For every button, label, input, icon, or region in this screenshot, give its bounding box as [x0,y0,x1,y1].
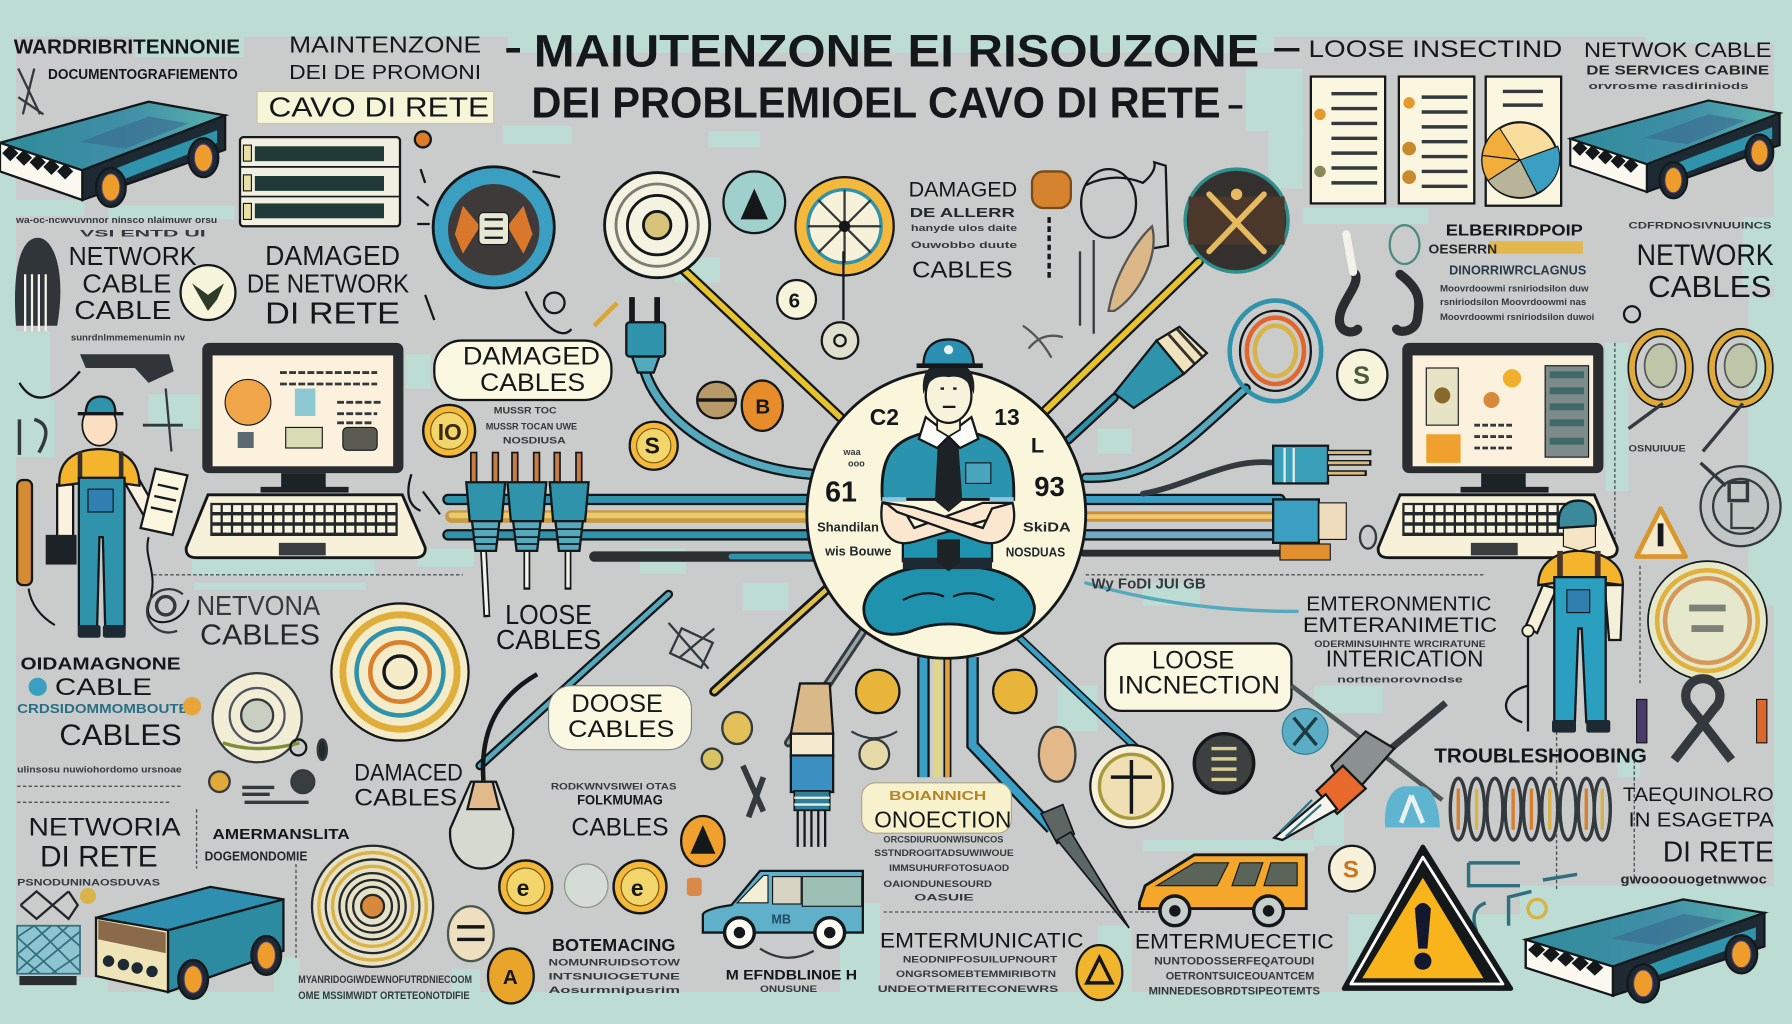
text: damaced cables: CABLES [354,785,457,812]
coins and doodles left of centre: IO [438,419,462,445]
mesh grid [17,888,96,985]
text block emtermunicatic [878,927,1083,994]
label: damaged cables: CABLES [480,369,585,397]
worker left [17,354,189,638]
fine print upper right: rsniriodsilon Moovrdoowmi nas [1440,297,1586,307]
heading: network cable top right: NETWOK CABLE [1584,37,1771,62]
coil top right [1230,301,1321,401]
fine print under coil: OME MSSIMWIDT ORTETEONOTDIFIE [298,990,470,1002]
fine numbers in circle: Shandilan [817,520,879,534]
small text amermanslita: DOGEMONDOMIE [205,850,307,864]
text block emtermunicatic: UNDEOTMERITECONEWRS [878,984,1058,994]
text: environment interaction: EMTERONMENTIC [1306,592,1492,615]
heading: maintenance box [257,32,494,123]
text: troubleshooting right [1621,784,1774,886]
label: loose connection: INCNECTION [1118,672,1280,700]
server rack [240,137,400,226]
cable spring [1450,778,1610,840]
text: environment interaction: Wy FoDI JUI GB [1091,577,1206,593]
text: netvona cables: CABLES [200,620,320,652]
label: connection: OASUIE [914,893,974,903]
text block cables lower middle: CABLES [571,813,669,841]
heading: top left maintenance [14,36,240,114]
fine print upper right: OESERRN [1429,243,1497,257]
cable ring right [1648,561,1767,680]
text: cable block left: ulinsosu nuwiohordomo ursnoae [17,765,182,775]
coil lower left [331,603,469,741]
documents with pie chart [1311,77,1561,206]
damaged cables top text [909,177,1017,283]
text block emtermuecetic: NUNTODOSSERFEQATOUDI [1154,956,1314,968]
label: connection: BOIANNICH [889,789,986,803]
screwdriver tool [1274,686,1446,840]
text: networia di rete: DI RETE [40,840,158,873]
text: cable block left: OIDAMAGNONE [21,654,181,674]
switch top left [0,102,225,207]
text: network cables right: NETWORK [1637,239,1774,272]
monitor left [202,343,403,493]
fine numbers in circle: waa [842,447,862,457]
heading: maintenance box: CAVO DI RETE [269,92,489,123]
label: loose connection: LOOSE [1152,647,1234,675]
damaged cables top text: DAMAGED [909,177,1017,202]
text: cable block left [17,654,189,775]
s badge bottom: S [1343,857,1359,884]
damaged cables top text: CABLES [912,257,1013,283]
title [506,25,1299,128]
text: cable block left: CRDSIDOMMOMBOUTE [17,702,189,716]
text block lower centre left: NOMUNRUIDSOTOW [549,958,681,968]
damaged cables top text: DE ALLERR [910,206,1015,220]
label: loose connection [1105,643,1291,711]
warning small right [1637,509,1686,557]
icon: wires hanging [1023,162,1168,358]
golden cable loops right [1624,306,1769,453]
text: network cable left [69,241,197,325]
small text amermanslita [205,827,350,864]
text: network cable left: CABLE [74,295,171,325]
text: damaged network di rete [247,240,410,330]
scattered doodles upper left [415,131,617,333]
keyboard right [1378,495,1617,558]
switch bottom right [1526,899,1764,1002]
label: connection: ORCSDIURUONWISUNCOS [883,834,1003,844]
text block cables lower middle: RODKWNVSIWEI OTAS [551,782,677,792]
text block emtermuecetic: OETRONTSUICEOUANTCEM [1166,970,1314,982]
label: connection: IMMSUHURFOTOSUAOD [889,863,1010,873]
coins and doodles left of centre: 6 [789,289,800,312]
small badge S: S [1353,362,1370,390]
icon: concentric cable coil [605,173,710,278]
text: damaged network di rete: DAMAGED [265,240,400,271]
heading: network cable top right: DE SERVICES CABINE [1586,63,1769,77]
three plugs [466,453,589,617]
heading: network cable top right: orvrosme rasdiriniods [1589,81,1749,91]
big warning triangle [1344,847,1511,989]
fine print upper right: Moovrdoowmi rsniriodsilon duwoi [1440,312,1594,322]
small badge S [1337,350,1387,400]
dashed separators [17,343,1640,958]
blue x badge [1282,709,1328,754]
badge cross [1090,745,1173,827]
fine print separators left [15,215,217,343]
fine print upper right: DINORRIWRCLAGNUS [1449,263,1586,277]
label: doose cables [549,686,691,750]
label: damaged cables: DAMAGED [463,343,600,371]
text: netvona cables: NETVONA [197,590,321,621]
spiral coil bottom [312,846,433,967]
icon: orange pot [1032,171,1071,208]
pliers icons [1339,225,1419,332]
text: cable block left: CABLES [59,719,182,752]
label: connection: ONOECTION [874,806,1011,832]
doodle near warning [1469,863,1577,931]
text block cables lower middle: FOLKMUMAG [577,793,663,808]
icon: bird badge [181,265,235,320]
text block lower centre left [549,935,857,995]
icon: blue ring connector [433,167,554,288]
text block emtermunicatic: ONGRSOMEBTEMMIRIBOTN [896,969,1056,979]
fine numbers in circle: C2 [870,404,899,430]
coil badge [183,673,327,762]
keyboard left [186,495,425,558]
label: doose cables: DOOSE [571,690,663,718]
label: connection [862,783,1014,903]
icon: crossed tools badge [1185,169,1288,272]
text: networia di rete: NETWORIA [29,813,181,841]
damaged cables top text: hanyde ulos daite [911,223,1017,233]
coins and doodles left of centre: S [645,433,660,459]
text: environment interaction: EMTERANIMETIC [1303,612,1497,637]
small text amermanslita: AMERMANSLITA [213,827,350,843]
fine numbers in circle: wis Bouwe [824,544,891,558]
plug lower centre [791,683,833,847]
cable connectors right of centre [1273,446,1376,560]
van [703,871,863,958]
heading: troubleshooting: TROUBLESHOOBING [1434,744,1647,767]
damaged cables top text: Ouwobbo duute [911,240,1017,250]
fine print upper right: Moovrdoowmi rsniriodsilon duw [1440,283,1590,293]
text block lower centre left: M EFNDBLIN0E H [726,967,857,982]
text block emtermuecetic: EMTERMUECETIC [1135,929,1334,954]
coins and doodles left of centre: NOSDIUSA [503,435,566,445]
fine print under coil: MYANRIDOGIWDEWNOFUTRDNIECOOM [298,974,472,986]
fine print upper right [1429,222,1594,322]
text block lower centre left: ONUSUNE [760,984,817,994]
title: MAIUTENZONE EI RISOUZONE [534,25,1259,76]
car [1139,855,1306,926]
grey coin right [1701,463,1781,546]
warning small and coins lower middle [488,816,725,1003]
icon: black cable bundle [15,238,60,331]
coins and doodles left of centre: MUSSR TOCAN UWE [486,422,577,432]
small doodles lower centre [209,623,1075,817]
text: damaged network di rete: DE NETWORK [247,269,410,299]
coins and doodles left of centre: B [755,396,770,419]
text: loose cables: LOOSE [505,599,592,630]
fine numbers in circle: L [1031,433,1044,458]
text: environment interaction [1091,577,1497,684]
fine numbers in circle: NOSDUAS [1006,546,1065,560]
text: cable block left: CABLE [55,674,152,701]
text: network cable left: NETWORK [69,241,197,271]
warning shield bottom [1077,945,1122,1000]
fine print separators left: sunrdnlmmemenumin nv [71,333,186,343]
fine numbers in circle: 93 [1034,471,1065,502]
heading: top left maintenance: DOCUMENTOGRAFIEMENTO [48,67,238,83]
fine numbers in circle: 61 [825,477,857,509]
text: damaged network di rete: DI RETE [265,295,400,330]
fine numbers in circle [817,404,1071,560]
heading: maintenance box: MAINTENZONE [289,32,481,58]
text: troubleshooting right: IN ESAGETPA [1629,808,1774,831]
golden cable loops right: OSNUIUUE [1629,443,1686,453]
seated worker figure [864,339,1034,634]
fine print upper right: ELBERIRDPOIP [1446,222,1583,239]
icon: clock [723,171,785,233]
ribbon and probes [1637,679,1767,760]
text block emtermuecetic: MINNEDESOBRDTSIPEOTEMTS [1149,985,1320,997]
text: environment interaction: INTERICATION [1326,645,1483,671]
label: connection: OAIONDUNESOURD [883,879,992,889]
text block lower centre left: BOTEMACING [552,935,675,955]
text block emtermuecetic [1135,929,1334,997]
coins and doodles left of centre: MUSSR TOC [494,406,557,416]
heading: loose inspecting: LOOSE INSECTIND [1309,36,1562,63]
text: networia di rete: PSNODUNINAOSDUVAS [17,878,160,888]
warning small and coins lower middle: e [631,875,644,901]
text: troubleshooting right: gwoooouogetnwwoc [1621,872,1767,886]
text block lower centre left: INTSNUIOGETUNE [549,971,680,981]
text: network cables right: CDFRDNOSIVNUUINCS [1629,221,1771,231]
text: troubleshooting right: DI RETE [1663,837,1774,869]
text: damaced cables [354,760,463,812]
text block emtermunicatic: EMTERMUNICATIC [880,927,1083,952]
warning small and coins lower middle: A [503,966,518,989]
text block lower centre left: Aosurmnipusrim [549,985,680,995]
text: loose cables [496,599,601,655]
label: damaged cables [434,341,611,400]
label: connection: SSTNDROGITADSUWIWOUE [874,848,1014,858]
fine print under coil [298,974,472,1002]
text: environment interaction: ODERMINSUIHNTE WRCIRATUNE [1314,639,1486,649]
fine numbers in circle: SkiDA [1023,520,1071,534]
text: network cable left: CABLE [82,269,171,299]
icon: wheel [795,177,894,275]
heading: network cable top right [1584,37,1771,91]
text: network cables right: CABLES [1648,269,1771,304]
cables radiating from the centre [448,262,1326,928]
rj45 connector top [626,297,665,373]
dark badge [1194,734,1254,793]
heading: maintenance box: DEI DE PROMONI [289,61,481,84]
bulb connector [450,782,513,869]
heading: top left maintenance: WARDRIBRITENNONIE [14,36,240,59]
text block emtermunicatic: NEODNIPFOSUILUPNOURT [903,954,1058,964]
text: damaced cables: DAMACED [354,760,463,787]
warning small and coins lower middle: e [517,875,529,901]
coins and doodles left of centre [408,251,858,514]
text: environment interaction: nortnenorovnodse [1337,674,1463,684]
van: MB [771,912,791,926]
text: netvona cables [147,589,321,652]
blue A icon [1385,786,1440,827]
fine print separators left: wa-oc-ncwvuvnnor ninsco nlaimuwr orsu [15,215,217,225]
text block cables lower middle [551,782,677,841]
badge lines [448,906,494,961]
text: loose cables: CABLES [496,624,601,655]
s badge bottom [1329,846,1375,891]
switch bottom left [96,887,283,999]
label: doose cables: CABLES [568,716,674,743]
fine print separators left: VSI ENTD UI [80,229,206,239]
fine numbers in circle: 13 [994,404,1020,430]
title: DEI PROBLEMIOEL CAVO DI RETE [531,80,1221,128]
central circle with worker [807,339,1086,658]
text: network cables right [1629,221,1774,304]
monitor right [1402,343,1603,493]
text: networia di rete [17,813,181,888]
fine numbers in circle: ooo [848,458,865,468]
worker right [1506,501,1623,733]
text: troubleshooting right: TAEQUINOLRO [1623,784,1774,806]
connector top right teal [1114,327,1207,408]
switch top right [1570,100,1780,198]
